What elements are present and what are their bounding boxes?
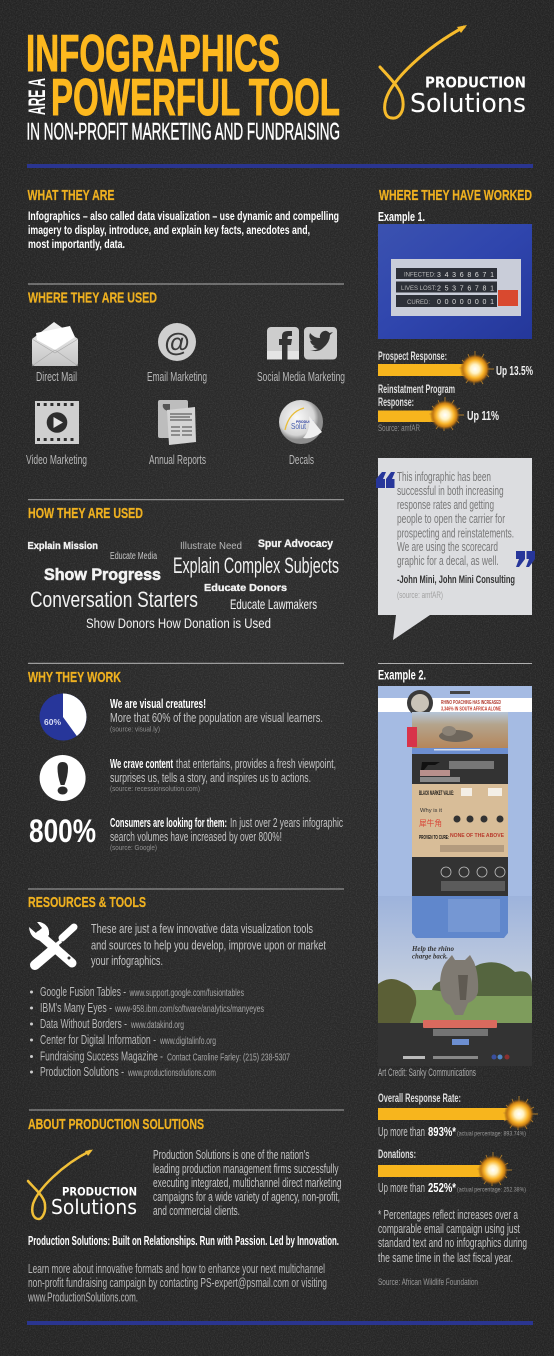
bar: reinstatement response: Response: — [378, 395, 414, 409]
panel: where they have worked — [376, 187, 538, 1287]
text: quote: response rates and getting — [397, 497, 494, 512]
icon: video — [35, 401, 79, 444]
text: resources intro — [91, 921, 326, 968]
text: visual creatures — [110, 697, 323, 734]
list: tools: www.datakind.org — [130, 1020, 184, 1031]
bar: donations: Donations: — [378, 1147, 416, 1161]
list: tools: Google Fusion Tables - — [40, 984, 126, 999]
panel: where they are used: Decals — [289, 452, 314, 467]
panel: where they are used: Email Marketing — [147, 369, 207, 384]
image: rhino infographic: PROVEN TO CURE: — [419, 835, 449, 841]
panel: what they are: most importantly, data. — [28, 237, 125, 251]
bar: prospect response: Up 13.5% — [496, 364, 533, 378]
list: tools — [30, 984, 290, 1079]
image: rhino infographic: Why is it — [420, 808, 443, 814]
text: consumers: search volumes have increased by over 800%! — [110, 829, 282, 844]
image: rhino infographic: Help the rhino — [411, 945, 454, 953]
text: about: and commercial clients. — [153, 1203, 240, 1218]
bar: prospect response — [378, 349, 533, 385]
bar: donations: 252%* — [428, 1180, 457, 1195]
word cloud: Conversation Starters — [30, 587, 198, 612]
text: about — [153, 1147, 342, 1218]
text: resources intro: and sources to help you develop, improve upon or market — [91, 938, 326, 952]
panel: how they are used — [28, 505, 339, 631]
list: tools: Data Without Borders - — [40, 1016, 127, 1031]
panel: where they are used — [26, 290, 345, 467]
word cloud: Educate Media — [110, 551, 157, 562]
bar: reinstatement response — [378, 382, 499, 433]
word cloud: Educate Donors — [204, 583, 287, 594]
list: tools: www.productionsolutions.com — [127, 1068, 216, 1079]
tagline: Production Solutions: Built on Relationships. Run with Passion. Led by Innovation. — [28, 1233, 339, 1248]
title: ARE A — [24, 78, 51, 115]
icon: direct mail — [32, 322, 78, 366]
text: resources intro: your infographics. — [91, 953, 163, 968]
panel: where they are used: WHERE THEY ARE USED — [28, 290, 157, 306]
panel: how they are used: HOW THEY ARE USED — [28, 505, 143, 522]
list: tools: Fundraising Success Magazine - — [40, 1048, 163, 1064]
text: resources intro: These are just a few innovative data visualization tools — [91, 921, 313, 936]
list: tools: www.support.google.com/fusiontables — [129, 988, 244, 999]
text: visual creatures: We are visual creatures! — [110, 697, 206, 711]
logo: Production Solutions header: PRODUCTION — [425, 74, 526, 92]
image: rhino infographic — [378, 686, 532, 1066]
panel: where they are used: Social Media Marketing — [257, 369, 345, 384]
icon: opening quote marks — [376, 472, 395, 488]
stat: 800%: 800% — [29, 813, 96, 849]
list: tools: www-958.ibm.com/software/analytics/manyeyes — [114, 1004, 264, 1015]
bar: overall response rate — [378, 1091, 538, 1139]
bar: reinstatement response: Source: amfAR — [378, 423, 420, 433]
word cloud: Show Progress — [44, 565, 161, 584]
title: INFOGRAPHICS — [26, 25, 280, 83]
word cloud: Educate Lawmakers — [230, 596, 317, 612]
panel: why they work — [28, 669, 343, 852]
bar: prospect response: Prospect Response: — [378, 349, 447, 363]
text: contact: Learn more about innovative formats and how to enhance your next multichannel — [28, 1261, 325, 1276]
panel: resources and tools: RESOURCES & TOOLS — [28, 894, 146, 911]
image: rhino infographic: NONE OF THE ABOVE — [450, 833, 505, 839]
text: consumers: Consumers are looking for them: — [110, 816, 227, 830]
text: about: executing integrated, multichannel direct marketing — [153, 1175, 342, 1190]
icon: decal — [279, 400, 323, 444]
bar: donations: Up more than — [378, 1180, 425, 1195]
bar: overall response rate: (actual percentage: 893.74%) — [457, 1130, 526, 1138]
logo: Production Solutions about: PRODUCTION — [62, 1185, 137, 1199]
image: rhino infographic: BLACK MARKET VALUE: — [419, 791, 454, 797]
icon: exclamation — [40, 755, 86, 801]
text: crave content: surprises us, tells a story, and inspires us to actions. — [110, 770, 311, 785]
text: about: campaigns for a wide variety of agency, non-profit, — [153, 1189, 340, 1204]
bar: overall response rate: Overall Response Rate: — [378, 1091, 461, 1105]
word cloud — [28, 538, 339, 631]
callout: quote — [376, 458, 535, 640]
panel: about production solutions: ABOUT PRODUCTION SOLUTIONS — [28, 1116, 204, 1133]
bar: overall response rate: Up more than — [378, 1124, 425, 1139]
text: crave content — [110, 756, 336, 793]
icon: annual reports — [158, 400, 196, 445]
word cloud: Illustrate Need — [180, 540, 242, 552]
bar: donations: (actual percentage: 252.38%) — [457, 1186, 526, 1194]
icon: email: @ — [164, 327, 190, 357]
image: scorecard decal: 0 0 0 0 0 0 0 1 — [437, 299, 494, 306]
text: footnote — [378, 1207, 527, 1287]
logo: Production Solutions about — [28, 1150, 137, 1219]
list: tools: Contact Caroline Farley: (215) 238-5307 — [167, 1052, 290, 1064]
panel: why they work: WHY THEY WORK — [28, 669, 121, 686]
list: tools: Center for Digital Information - — [40, 1032, 156, 1047]
panel: where they have worked: Example 2. — [378, 668, 426, 682]
icon: twitter — [304, 327, 337, 360]
text: quote: This infographic has been — [397, 469, 491, 484]
list: tools: Production Solutions - — [40, 1064, 124, 1079]
text: consumers: (source: Google) — [110, 843, 157, 852]
text: about: Production Solutions is one of the nation's — [153, 1147, 310, 1162]
text: quote — [397, 469, 515, 600]
image: scorecard decal — [378, 224, 532, 339]
bar: overall response rate: 893%* — [428, 1124, 457, 1139]
text: contact: non-profit fundraising campaign by contacting PS-expert@psmail.com or visiting — [28, 1275, 327, 1290]
title: POWERFUL TOOL — [51, 69, 340, 127]
panel: what they are: Infographics – also called data visualization – use dynamic and compelling — [28, 209, 339, 223]
list: tools: www.digitalinfo.org — [159, 1036, 216, 1047]
panel: where they are used: Direct Mail — [36, 369, 77, 384]
text: visual creatures: More that 60% of the population are visual learners. — [110, 710, 323, 725]
image: rhino infographic: 3,346% IN SOUTH AFRICA ALONE — [441, 706, 501, 712]
panel: where they are used: Annual Reports — [149, 452, 206, 467]
list: tools: IBM's Many Eyes - — [40, 1000, 112, 1015]
word cloud: Explain Mission — [28, 541, 98, 552]
text: about: leading production management firms successfully — [153, 1161, 339, 1176]
image: scorecard decal: CURED: — [407, 300, 430, 306]
icon: wrench and screwdriver — [29, 922, 74, 965]
logo: Production Solutions header — [380, 25, 526, 119]
panel: what they are: imagery to display, introduce, and explain key facts, anecdotes and, — [28, 223, 310, 237]
logo: Production Solutions about: Solutions — [51, 1195, 137, 1219]
text: footnote: Source: African Wildlife Foundation — [378, 1277, 478, 1287]
icon: closing quote marks — [516, 551, 535, 567]
text: quote: We are using the scorecard — [397, 539, 498, 554]
logo: Production Solutions header: Solutions — [410, 89, 526, 119]
caption: art credit: Art Credit: Sanky Communications — [378, 1067, 476, 1079]
panel: what they are — [28, 187, 339, 251]
panel: resources and tools — [28, 894, 326, 1079]
text: consumers — [110, 815, 343, 852]
panel: what they are: WHAT THEY ARE — [28, 187, 114, 204]
image: rhino infographic: charge back. — [412, 952, 448, 960]
image: scorecard decal: LIVES LOST: — [401, 286, 437, 292]
text: quote: (source: amfAR) — [397, 590, 443, 600]
text: crave content: (source: recessionsolution.com) — [110, 784, 200, 793]
chart: 60% pie: 60% — [44, 717, 61, 727]
text: crave content: We crave content — [110, 757, 174, 771]
image: scorecard decal: 3 4 3 6 8 6 7 1 — [437, 272, 494, 279]
word cloud: Explain Complex Subjects — [173, 553, 339, 578]
text: visual creatures: (source: visual.ly) — [110, 724, 160, 734]
image: scorecard decal: 2 5 3 7 6 7 8 1 — [437, 286, 494, 292]
image: rhino infographic: 犀牛角 — [419, 818, 442, 828]
panel: where they have worked: Example 1. — [378, 209, 425, 224]
word cloud: Show Donors How Donation is Used — [86, 615, 271, 631]
icon: decal: PRODUCT — [296, 420, 314, 424]
panel: about production solutions — [27, 1116, 342, 1304]
text: quote: graphic for a decal, as well. — [397, 553, 499, 568]
title — [24, 25, 340, 146]
text: consumers: In just over 2 years infographic — [230, 815, 343, 830]
icon: email — [158, 323, 196, 361]
text: contact — [27, 1261, 327, 1304]
text: contact: www.ProductionSolutions.com. — [27, 1290, 138, 1304]
word cloud: Spur Advocacy — [258, 538, 334, 550]
chart: 60% pie — [40, 694, 86, 740]
icon: facebook — [267, 327, 299, 360]
panel: where they are used: Video Marketing — [26, 452, 87, 467]
bar: donations — [378, 1147, 526, 1195]
text: crave content: that entertains, provides a fresh viewpoint, — [176, 756, 336, 771]
icon: decal: Solut — [291, 422, 307, 431]
bar: reinstatement response: Up 11% — [467, 409, 499, 423]
bar: reinstatement response: Reinstatment Program — [378, 382, 455, 396]
image: scorecard decal: INFECTED: — [404, 272, 436, 278]
image: rhino infographic: RHINO POACHING HAS INCREASED — [441, 700, 501, 706]
